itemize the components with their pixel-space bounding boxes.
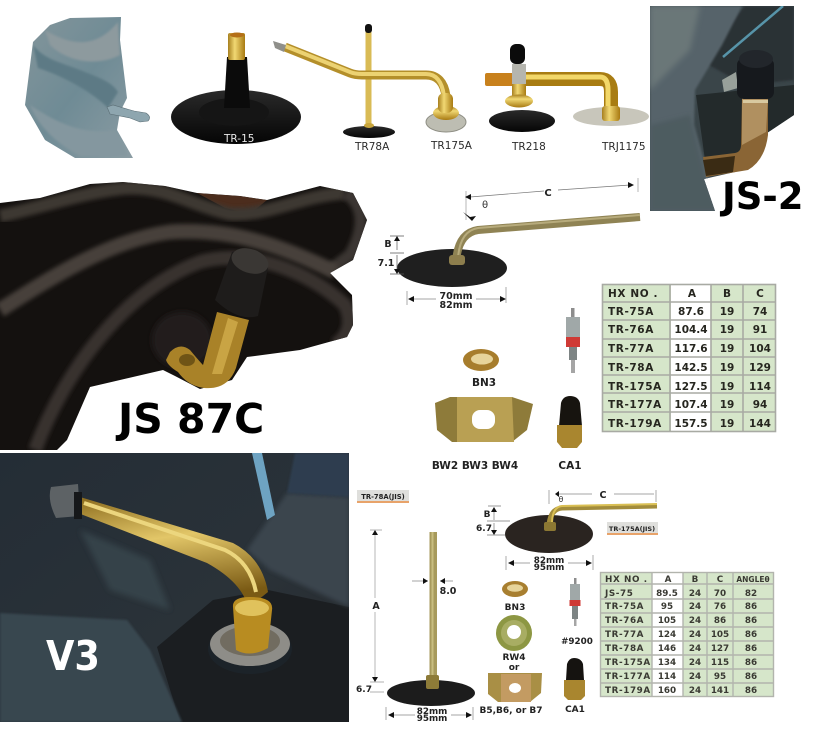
table: JS/TR series dimensions (24 mm): TR-75A (605, 602, 644, 612)
table: JS/TR series dimensions (24 mm): 70 (714, 589, 726, 599)
table: JS/TR series dimensions (24 mm): 86 (745, 602, 757, 612)
table: TR series dimensions (19 mm): 104.4 (674, 324, 708, 336)
dimension: B and 7.1: B (384, 239, 392, 250)
icon: brass valve with black cap (166, 244, 272, 388)
table: JS/TR series dimensions (24 mm): 105 (711, 630, 729, 640)
label: JS-2: JS-2 (719, 175, 804, 218)
dimension: 8.0 (412, 578, 457, 597)
table: TR series dimensions (19 mm): 104 (749, 343, 771, 355)
icon: TR175A bent valve (273, 41, 466, 132)
table: TR series dimensions (19 mm): 19 (720, 306, 734, 318)
label: RW4 or: RW4 (502, 653, 526, 663)
dimension: A (356, 530, 384, 695)
dimension: B and 6.7: B (484, 510, 491, 520)
table: JS/TR series dimensions (24 mm): HX NO . (605, 575, 648, 585)
table: TR series dimensions (19 mm): TR-175A (608, 381, 662, 393)
icon: tube valve stem (107, 105, 150, 122)
table: JS/TR series dimensions (24 mm): 160 (658, 686, 676, 696)
table: TR series dimensions (19 mm): 117.6 (674, 343, 708, 355)
tag: TR-78A(JIS) (357, 490, 409, 503)
label: V3: V3 (46, 632, 100, 680)
table: TR series dimensions (19 mm): 114 (749, 381, 771, 393)
label: TR78A: TR78A (354, 141, 390, 153)
dimension: C (465, 178, 638, 220)
table: JS/TR series dimensions (24 mm): TR-77A (605, 630, 644, 640)
table: TR series dimensions (19 mm): TR-75A (608, 306, 654, 318)
dimension: 82mm 95mm (386, 707, 473, 724)
table: JS/TR series dimensions (24 mm): 95 (714, 672, 726, 682)
icon: BN3 nut lower (502, 581, 528, 597)
icon: TRJ1175 silver base (573, 106, 649, 126)
dimension: C and theta (549, 490, 656, 504)
table: TR series dimensions (19 mm): 19 (720, 381, 734, 393)
table: JS/TR series dimensions (24 mm): 82 (745, 589, 757, 599)
label: BW2 BW3 BW4: BW2 BW3 BW4 (432, 460, 518, 472)
label: CA1 lower: CA1 (565, 705, 585, 715)
icon: valve in JS-2 photo (703, 50, 774, 177)
table: TR series dimensions (19 mm): 19 (720, 362, 734, 374)
label: TR-15: TR-15 (223, 133, 254, 145)
label: B5,B6, or B7: B5,B6, or B7 (479, 706, 543, 716)
table: TR series dimensions (19 mm): A (688, 288, 697, 300)
table: JS/TR series dimensions (24 mm): 105 (658, 616, 676, 626)
table: JS/TR series dimensions (24 mm): TR-179A (605, 686, 651, 696)
table: JS/TR series dimensions (24 mm): 76 (714, 602, 726, 612)
table: JS/TR series dimensions (24 mm): 86 (745, 686, 757, 696)
dimension: theta: θ (482, 200, 488, 211)
table: TR series dimensions (19 mm): TR-179A (608, 418, 662, 430)
table: JS/TR series dimensions (24 mm): 24 (689, 686, 701, 696)
icon: TR218 valve (485, 44, 611, 132)
table: JS/TR series dimensions (24 mm): C (717, 575, 723, 585)
dimension: A: A (372, 601, 380, 612)
table: TR series dimensions (19 mm): 19 (720, 399, 734, 411)
table: JS/TR series dimensions (24 mm): 95 (661, 602, 673, 612)
table: JS/TR series dimensions (24 mm): 86 (745, 658, 757, 668)
table: TR series dimensions (19 mm): 19 (720, 418, 734, 430)
panel: inner tube photo, blue-grey (25, 17, 150, 158)
table: JS/TR series dimensions (24 mm): 24 (689, 644, 701, 654)
table: TR series dimensions (19 mm): 127.5 (674, 381, 708, 393)
dimension: B and 7.1 (378, 236, 404, 274)
icon: CA1 cap (557, 396, 582, 448)
table: JS/TR series dimensions (24 mm): JS-75 (604, 589, 634, 599)
label: BN3: BN3 (472, 377, 496, 389)
dimension: 70mm 82mm: 70mm (439, 291, 473, 302)
dimension: C: C (544, 188, 552, 199)
label: TR218: TR218 (511, 141, 546, 153)
dimension: B and 6.7 (476, 506, 510, 535)
table: JS/TR series dimensions (24 mm): 127 (711, 644, 729, 654)
label: JS 87C: JS 87C (115, 395, 264, 443)
label: RW4 or: or (509, 663, 520, 673)
dimension: B and 6.7: 6.7 (476, 524, 492, 534)
table: JS/TR series dimensions (24 mm): 24 (689, 630, 701, 640)
table: JS/TR series dimensions (24 mm): 141 (711, 686, 729, 696)
table: JS/TR series dimensions (24 mm): 146 (658, 644, 676, 654)
table: JS/TR series dimensions (24 mm): TR-76A (605, 616, 644, 626)
dimension: 70mm 82mm (407, 287, 506, 311)
dimension: A: 6.7 (356, 685, 372, 695)
table: JS/TR series dimensions (24 mm): 86 (745, 616, 757, 626)
label: TRJ1175: TRJ1175 (601, 141, 646, 153)
table: JS/TR series dimensions (24 mm): 24 (689, 672, 701, 682)
icon: BN3 nut (463, 349, 499, 371)
table: JS/TR series dimensions (24 mm): 115 (711, 658, 729, 668)
table: TR series dimensions (19 mm): TR-177A (608, 399, 662, 411)
table: TR series dimensions (19 mm): 144 (749, 418, 771, 430)
icon: valve core (566, 308, 580, 373)
table: TR series dimensions (19 mm): TR-76A (608, 324, 654, 336)
tag: TR-78A(JIS): TR-78A(JIS) (361, 493, 405, 501)
icon: TR-15 rubber base valve (171, 32, 301, 144)
panel: V3 photo (0, 453, 349, 722)
dimension: theta (463, 200, 488, 221)
table: TR series dimensions (19 mm): 74 (753, 306, 767, 318)
diagram: upper valve dimensions (378, 178, 640, 311)
dimension: 82mm 95mm: 95mm (417, 714, 447, 724)
table: JS/TR series dimensions (24 mm): 24 (689, 616, 701, 626)
tag: TR-175A(JIS): TR-175A(JIS) (609, 525, 655, 533)
icon: RW4 washer (496, 615, 532, 651)
table: JS/TR series dimensions (24 mm): 86 (745, 672, 757, 682)
panel: JS-2 photo (650, 6, 794, 211)
table: JS/TR series dimensions (24 mm): 124 (658, 630, 676, 640)
tag: TR-175A(JIS) (607, 522, 658, 535)
table: TR series dimensions (19 mm) (602, 284, 776, 432)
table: JS/TR series dimensions (24 mm): 24 (689, 602, 701, 612)
table: TR series dimensions (19 mm): 157.5 (674, 418, 708, 430)
label: CA1: CA1 (558, 460, 582, 472)
dimension: 82mm 95mm: 82mm (417, 707, 447, 717)
icon: #9200 valve core (570, 578, 580, 626)
table: TR series dimensions (19 mm): 91 (753, 324, 767, 336)
table: JS/TR series dimensions (24 mm): TR-78A (605, 644, 644, 654)
table: JS/TR series dimensions (24 mm): 86 (714, 616, 726, 626)
table: TR series dimensions (19 mm): 94 (753, 399, 767, 411)
table: TR series dimensions (19 mm): HX NO . (608, 288, 658, 300)
table: JS/TR series dimensions (24 mm): 86 (745, 630, 757, 640)
dimension: 82mm 95mm: 95mm (534, 563, 564, 573)
table: TR series dimensions (19 mm): TR-77A (608, 343, 654, 355)
table: TR series dimensions (19 mm): TR-78A (608, 362, 654, 374)
dimension: 70mm 82mm: 82mm (439, 300, 473, 311)
table: TR series dimensions (19 mm): 19 (720, 343, 734, 355)
table: TR series dimensions (19 mm): 129 (749, 362, 771, 374)
table: JS/TR series dimensions (24 mm): 89.5 (656, 589, 678, 599)
table: TR series dimensions (19 mm): C (756, 288, 764, 300)
table: TR series dimensions (19 mm): 19 (720, 324, 734, 336)
icon: TR78A straight valve (343, 24, 395, 138)
table: TR series dimensions (19 mm): 142.5 (674, 362, 708, 374)
label: BN3 lower: BN3 (505, 603, 525, 613)
dimension: 8.0: 8.0 (440, 586, 457, 597)
panel: JS 87C photo (0, 172, 372, 452)
table: JS/TR series dimensions (24 mm): 114 (658, 672, 676, 682)
table: JS/TR series dimensions (24 mm): 24 (689, 658, 701, 668)
table: JS/TR series dimensions (24 mm): 24 (689, 589, 701, 599)
table: TR series dimensions (19 mm): B (723, 288, 731, 300)
dimension: C and theta: C (600, 490, 607, 501)
label: #9200: #9200 (561, 637, 593, 647)
table: JS/TR series dimensions (24 mm): A (665, 575, 672, 585)
table: JS/TR series dimensions (24 mm) (600, 572, 774, 697)
table: JS/TR series dimensions (24 mm): 86 (745, 644, 757, 654)
dimension: C and theta: θ (559, 495, 564, 504)
table: JS/TR series dimensions (24 mm): ANGLEθ (736, 575, 770, 584)
table: JS/TR series dimensions (24 mm): TR-177A (605, 672, 651, 682)
dimension: 82mm 95mm: 82mm (534, 556, 564, 566)
table: JS/TR series dimensions (24 mm): 134 (658, 658, 676, 668)
table: TR series dimensions (19 mm): 87.6 (678, 306, 704, 318)
diagram: TR-78A straight valve (356, 530, 475, 724)
icon: V3 brass valve (50, 484, 292, 674)
dimension: B and 7.1: 7.1 (378, 258, 394, 269)
table: JS/TR series dimensions (24 mm): B (692, 575, 699, 585)
icon: CA1 cap lower (564, 658, 585, 700)
icon: BW plate (435, 397, 533, 442)
label: TR175A: TR175A (430, 140, 473, 152)
diagram: TR-175A bent valve (476, 490, 657, 573)
table: JS/TR series dimensions (24 mm): TR-175A (605, 658, 651, 668)
label: RW4 or (502, 653, 526, 673)
icon: B5 plate (488, 673, 542, 702)
dimension: 82mm 95mm (506, 555, 593, 573)
table: TR series dimensions (19 mm): 107.4 (674, 399, 708, 411)
